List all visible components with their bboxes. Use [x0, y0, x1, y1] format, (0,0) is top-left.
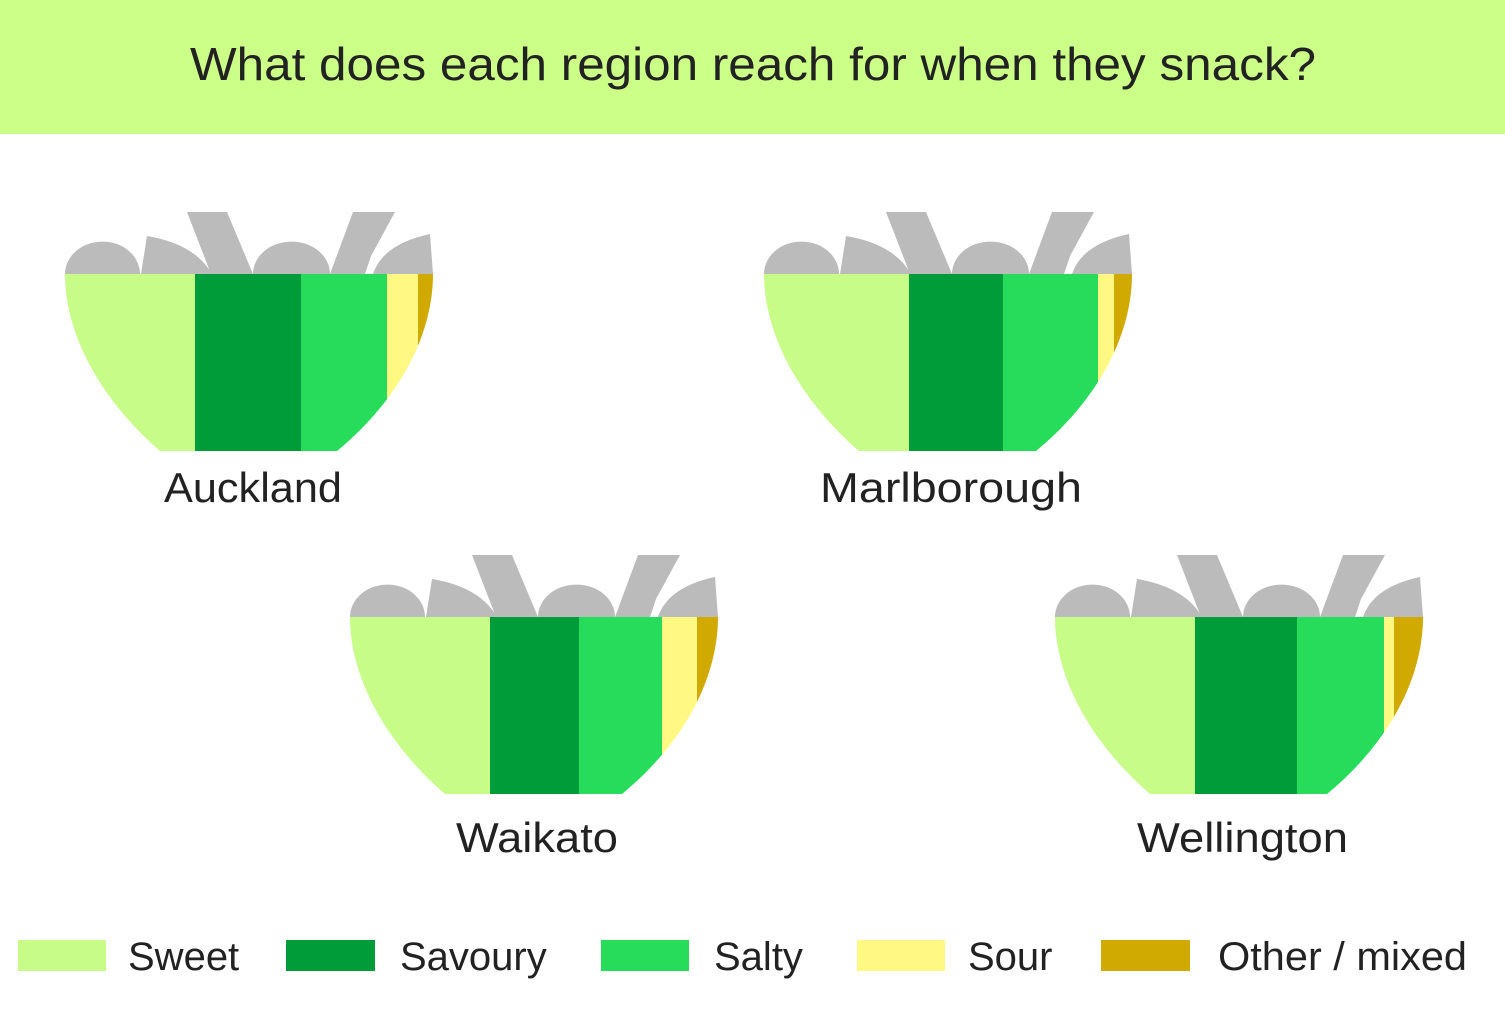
title banner: What does each region reach for when they snack?: [190, 38, 1316, 90]
legend: Sour: [968, 935, 1052, 979]
legend: Salty: [714, 935, 803, 979]
legend: Savoury: [400, 935, 547, 979]
legend: Other / mixed: [1218, 935, 1467, 979]
bowl: Wellington: [1055, 555, 1423, 794]
label: Marlborough: Marlborough: [820, 464, 1082, 511]
legend: [18, 935, 1467, 979]
legend: Sweet: [128, 935, 239, 979]
label: Auckland: Auckland: [164, 464, 342, 511]
bowl: Waikato: [350, 555, 718, 794]
title banner: [0, 0, 1505, 134]
label: Waikato: Waikato: [456, 814, 618, 861]
label: Wellington: Wellington: [1137, 814, 1348, 861]
bowl: Auckland: [65, 212, 433, 451]
bowl: Marlborough: [764, 212, 1132, 451]
